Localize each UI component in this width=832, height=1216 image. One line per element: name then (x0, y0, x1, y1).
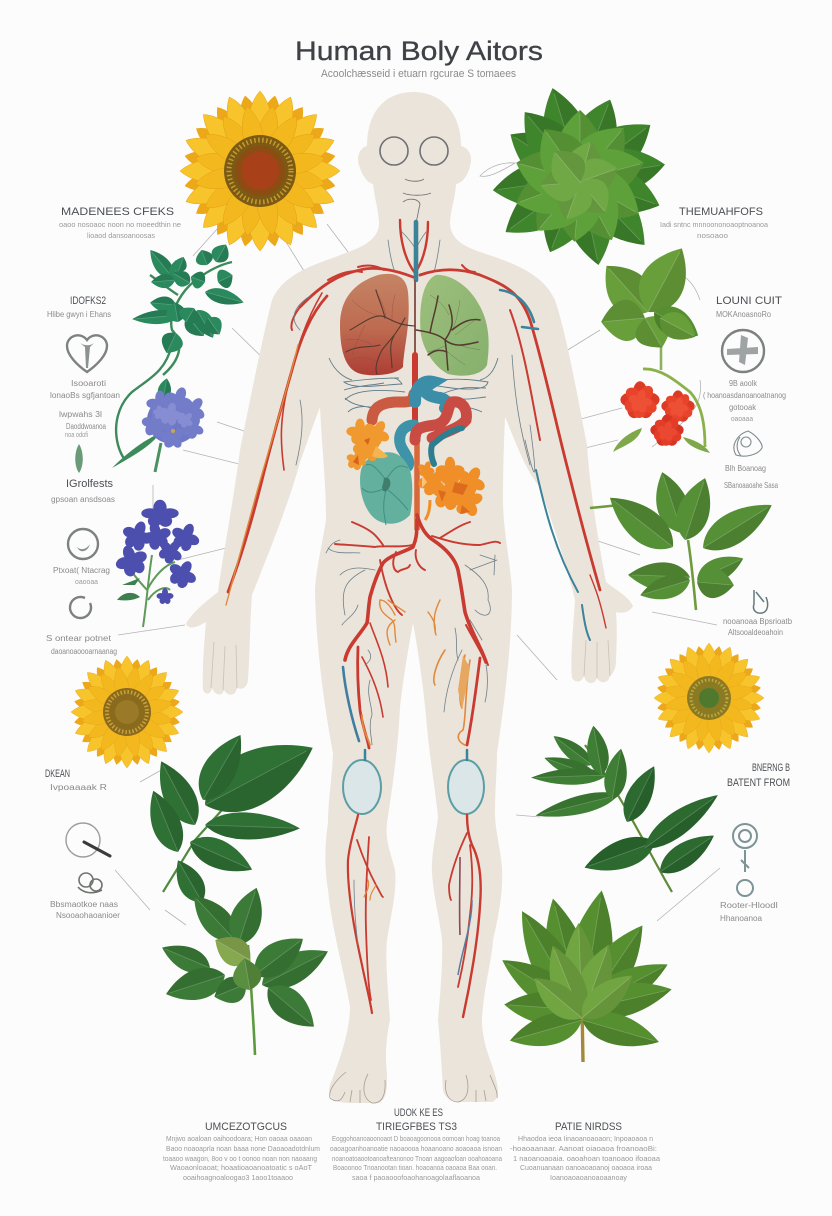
left lung (340, 274, 409, 375)
left label: top: lioaod dansoanoosas (87, 231, 155, 240)
leafy bush bottom right (493, 887, 675, 1062)
bottom column: left: Baoo noaoaprla noan baaa none Daoaoadotdnlum (166, 1144, 320, 1153)
left label: seventh: DKEAN (45, 768, 70, 780)
right label: top (660, 206, 769, 240)
connector lines (115, 163, 720, 925)
lungs (340, 274, 489, 376)
bottom column: middle: Boaoonoo Tnoanootan tioan. hoaoanoa oaoaoa Baa ooan. (333, 1163, 497, 1172)
leaf branch bottom left (140, 723, 325, 908)
left label: eighth (50, 900, 120, 920)
bottom column: middle: saoa f paoaooofoaohanoagolaaflaoanoa (352, 1173, 481, 1182)
human body figure (186, 92, 633, 1103)
right label: third (703, 379, 786, 423)
leafy plant bottom left (157, 883, 335, 1055)
leafy plant right (590, 467, 780, 610)
right label: third: 9B aoolk (729, 379, 758, 388)
central descending vessel (414, 438, 420, 530)
left label: third: Isooaroti (71, 379, 106, 388)
right label: third: gotooak (729, 403, 757, 412)
bottom column: left: toaaoo waagon, 8oo v oo t oonoo noan non naoaang (163, 1154, 317, 1163)
right label: third: oaoaaa (731, 414, 754, 423)
orange flower left (344, 415, 395, 472)
right label: sixth (727, 762, 790, 789)
left label: second: Hlibe gwyn i Ehans (47, 310, 111, 319)
left label: top: oaoo nosoaoc noon no moeedthin ne (59, 220, 181, 229)
knee left (343, 760, 381, 814)
purple flower cluster (111, 500, 205, 627)
left label: fifth: oaooaa (75, 577, 99, 586)
icon: hook (753, 590, 768, 613)
right lung (420, 275, 489, 376)
icon: key ring (733, 824, 757, 896)
bottom column: right: PATIE NIRDSS (555, 1121, 622, 1133)
right label: top: THEMUAHFOFS (679, 206, 763, 218)
bottom column: left: UMCEZOTGCUS (205, 1121, 287, 1133)
icon: ring with pin (66, 823, 110, 857)
purple pom flower (112, 383, 212, 472)
left label: seventh: Ivpoaaaak R (50, 783, 107, 792)
title: Human Boly Aitors (295, 36, 543, 66)
bottom column: left: Waoaonloaoat; hoaatioaoanoatoatic s oAoT (170, 1163, 312, 1172)
left label: seventh (45, 768, 107, 792)
right label: fifth (723, 617, 793, 637)
right label: fifth: Altsooaldeoahoin (728, 628, 783, 637)
fern branch right (531, 724, 725, 892)
face: eye rings (380, 137, 448, 165)
left label: third (50, 379, 120, 439)
left label: third: lonaoBs sgfjantoan (50, 391, 120, 400)
left label: top: MADENEES CFEKS (61, 206, 174, 218)
bottom column: right: Ioanoaoaoanoaoaanoay (550, 1173, 627, 1182)
left label: top (59, 206, 181, 240)
subtitle: Acoolchæsseid i etuarn rgcurae S tomaees (321, 68, 516, 80)
teal kidney organ (360, 452, 412, 525)
icon: coil (734, 431, 762, 456)
left lung veins (345, 290, 395, 362)
left label: fourth: gpsoan ansdsoas (51, 495, 115, 504)
right label: fourth (724, 464, 778, 490)
face: nose and mouth (403, 179, 431, 222)
icon: knot (78, 873, 102, 893)
central aorta (412, 355, 418, 440)
right label: fourth: SBanoaaoahe Sasa (724, 481, 778, 490)
body silhouette (186, 92, 633, 1103)
orange flower right (413, 457, 491, 521)
finger outlines (211, 640, 610, 690)
left label: sixth: daoanoaoooarnaanag (51, 647, 117, 656)
bottom column: right: -hoaoaanaar. Aanoat oiaoaoa froanoaoBi: (510, 1144, 657, 1153)
icon: circular arrow (70, 597, 91, 618)
left label: fifth (53, 566, 110, 586)
right label: seventh: Hhanoanoa (720, 914, 763, 923)
bottom column: left: Mnjwo aoaloan oaihoodoara; Hon oaoaa oaaoan (166, 1134, 312, 1143)
left label: third: lwpwahs 3l (59, 410, 102, 419)
icon: small bud (75, 444, 83, 473)
bottom column: middle: Eoggohoanoaoonoaot D boaoagoonooa oomoan hoag toanoa (332, 1134, 501, 1143)
left label: third: Daoddwoanoa (66, 422, 106, 431)
sunflower top left (93, 4, 427, 338)
neck and arm vessels (226, 220, 606, 640)
bottom column: middle: UDOK KE ES (394, 1107, 443, 1119)
leaf rosette top right (490, 82, 668, 270)
left lung bronchi (346, 290, 415, 374)
bottom column: left: ooaihoagnoaloogao3 1aoo1toaaoo (183, 1173, 293, 1182)
sunflower left (10, 595, 244, 829)
bottom column: middle: noanoatoaootoanoafteanonoo Tnoan aagoaofoan ooahoaoana (332, 1154, 503, 1163)
bottom column: right: Cuoanuanaan oanoaoaoanoj oaoaoa iroaa (520, 1163, 653, 1172)
bottom column: middle: oaoagoanhoanoatie naoaoooa hoaanoano aoaoaoa isnoan (330, 1144, 502, 1153)
icon: drop ring (68, 529, 98, 559)
right label: top: nosoaoo (697, 231, 728, 240)
leaf trio top right (591, 238, 705, 370)
left label: eighth: Nsooaohaoanioer (56, 911, 120, 920)
left label: fifth: Ptxoat( Ntacrag (53, 566, 110, 575)
green sprig (116, 240, 246, 460)
left label: fourth: IGrolfests (66, 478, 113, 490)
bottom column: middle: TIRIEGFBES TS3 (376, 1121, 457, 1133)
right label: second: LOUNI CUIT (716, 295, 782, 307)
right label: third: ( hoanoasdanoanoatnanog (703, 391, 786, 400)
knee right (448, 760, 484, 814)
bottom column: right: Hhaodoa ieoa Iinaoanoaoaon; Inpoaoaoa n (518, 1134, 653, 1143)
left label: second (47, 295, 111, 319)
red flowers (613, 369, 710, 453)
foot toes (330, 1072, 497, 1103)
right label: top: Iadi sntnc mnnoononoaoptnoanoa (660, 220, 769, 229)
right label: seventh: Rooter-HloodI (720, 901, 778, 910)
bottom column: right: 1 naoanoaoaia. oaoahoan toanoaoo ifoaoaa (513, 1154, 661, 1163)
icon: seal ring (722, 330, 764, 372)
rib outlines (329, 358, 498, 412)
bottom column: right (510, 1121, 661, 1182)
left label: third: noa odofi (65, 430, 88, 439)
intestines (372, 382, 466, 466)
left label: second: IDOFKS2 (70, 295, 106, 307)
pelvic and leg vessels (326, 515, 500, 1017)
right lung veins (428, 295, 480, 365)
right label: sixth: BATENT FROM (727, 777, 790, 789)
left label: fourth (51, 478, 115, 504)
bottom column: left (163, 1121, 320, 1182)
right lung bronchi (416, 296, 480, 370)
sunflower right (594, 583, 824, 813)
right label: second (716, 295, 782, 319)
left label: sixth (46, 634, 117, 656)
right label: sixth: BNERNG B (752, 762, 790, 774)
right label: seventh (720, 901, 778, 923)
icon: heart ring (67, 335, 107, 372)
left label: sixth: S ontear potnet (46, 634, 112, 643)
right label: fifth: nooanoaa Bpsrioatb (723, 617, 793, 626)
bottom column: middle (330, 1107, 503, 1182)
right label: second: MOKAnoasnoRo (716, 310, 772, 319)
left label: eighth: Bbsmaotkoe naas (50, 900, 118, 909)
right label: fourth: Blh Boanoag (725, 464, 766, 473)
